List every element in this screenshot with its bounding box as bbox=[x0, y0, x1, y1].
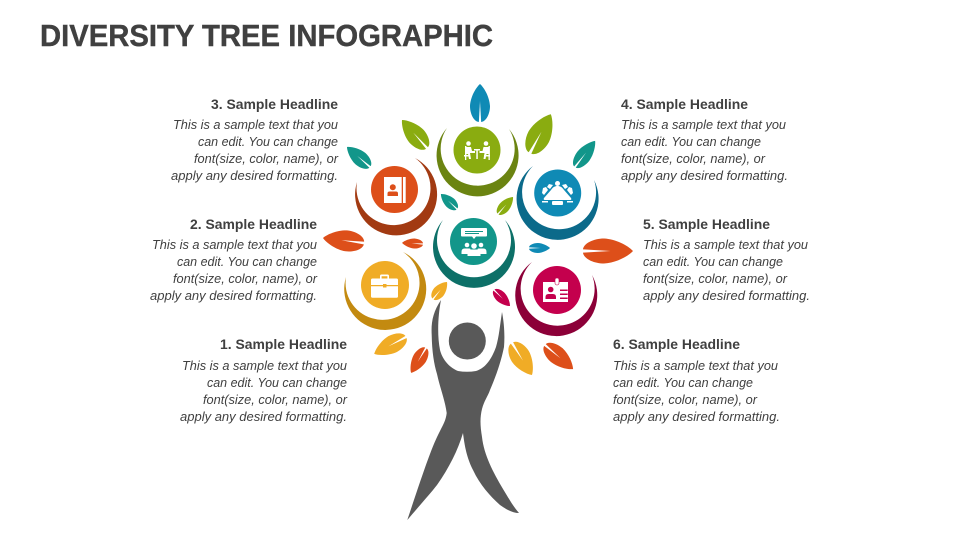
text block 3 bbox=[171, 96, 339, 183]
text block 3: This is a sample text that you bbox=[173, 117, 338, 132]
leaf: red left bbox=[322, 228, 367, 254]
text block 3: apply any desired formatting. bbox=[171, 168, 338, 183]
text block 1: This is a sample text that you bbox=[182, 358, 347, 373]
icon: briefcase bbox=[371, 274, 398, 298]
leaves bbox=[322, 84, 633, 380]
text block 5: font(size, color, name), or bbox=[643, 271, 788, 286]
node: green (meeting) bbox=[437, 126, 519, 196]
text block 4: font(size, color, name), or bbox=[621, 151, 766, 166]
leaf: yellow lower left bbox=[370, 329, 411, 362]
text block 1: 1. Sample Headline bbox=[220, 336, 347, 352]
text block 6: 6. Sample Headline bbox=[613, 336, 740, 352]
text block 6 bbox=[613, 336, 780, 424]
icon: address book bbox=[384, 177, 406, 203]
text block 1: can edit. You can change bbox=[207, 375, 347, 390]
text block 6: This is a sample text that you bbox=[613, 358, 778, 373]
text block 3: can edit. You can change bbox=[198, 134, 338, 149]
icon: conference table bbox=[542, 181, 573, 205]
text block 5: This is a sample text that you bbox=[643, 237, 808, 252]
text block 4 bbox=[621, 96, 788, 183]
text block 3: 3. Sample Headline bbox=[211, 96, 338, 112]
leaf: small red bbox=[402, 238, 424, 249]
text block 6: font(size, color, name), or bbox=[613, 392, 758, 407]
leaf: red lower right bbox=[538, 337, 579, 376]
node: magenta (ID card) bbox=[515, 262, 597, 336]
text block 4: 4. Sample Headline bbox=[621, 96, 748, 112]
text block 6: can edit. You can change bbox=[613, 375, 753, 390]
text block 5: 5. Sample Headline bbox=[643, 216, 770, 232]
node: yellow (briefcase) bbox=[344, 252, 426, 330]
text block 2: apply any desired formatting. bbox=[150, 288, 317, 303]
leaf: green upper right bbox=[519, 109, 561, 160]
leaf: small magenta bbox=[490, 286, 514, 310]
text block 3: font(size, color, name), or bbox=[194, 151, 339, 166]
text block 4: This is a sample text that you bbox=[621, 117, 786, 132]
text block 2 bbox=[150, 216, 318, 303]
text block 2: font(size, color, name), or bbox=[173, 271, 318, 286]
text block 4: apply any desired formatting. bbox=[621, 168, 788, 183]
node: red (address book) bbox=[355, 158, 437, 235]
text block 2: 2. Sample Headline bbox=[190, 216, 317, 232]
leaf: red right bbox=[582, 238, 633, 264]
text block 2: This is a sample text that you bbox=[152, 237, 317, 252]
leaf: red lower left bbox=[405, 344, 432, 376]
leaf: small green bbox=[493, 193, 517, 218]
node: blue (conference table) bbox=[517, 166, 599, 240]
text block 5: can edit. You can change bbox=[643, 254, 783, 269]
title: DIVERSITY TREE INFOGRAPHIC bbox=[40, 19, 493, 53]
icon: audience and speech board bbox=[461, 228, 487, 256]
text block 4: can edit. You can change bbox=[621, 134, 761, 149]
leaf: yellow lower right bbox=[503, 337, 540, 380]
leaf: small yellow bbox=[428, 278, 452, 303]
leaf: teal right bbox=[568, 136, 601, 172]
leaf: blue top bbox=[470, 84, 490, 123]
leaf: small teal bbox=[437, 190, 461, 213]
text block 5: apply any desired formatting. bbox=[643, 288, 810, 303]
text block 6: apply any desired formatting. bbox=[613, 409, 780, 424]
text block 1: font(size, color, name), or bbox=[203, 392, 348, 407]
leaf: green upper left bbox=[395, 114, 435, 155]
icon: ID badge bbox=[543, 278, 568, 302]
text block 2: can edit. You can change bbox=[177, 254, 317, 269]
node: teal (presentation) bbox=[433, 218, 515, 288]
text block 5 bbox=[643, 216, 810, 303]
text block 1: apply any desired formatting. bbox=[180, 409, 347, 424]
icon: people at desk bbox=[464, 141, 490, 160]
person figure bbox=[407, 300, 519, 520]
leaf: teal left bbox=[342, 141, 376, 173]
leaf: small blue bbox=[528, 243, 550, 253]
text block 1 bbox=[180, 336, 348, 424]
